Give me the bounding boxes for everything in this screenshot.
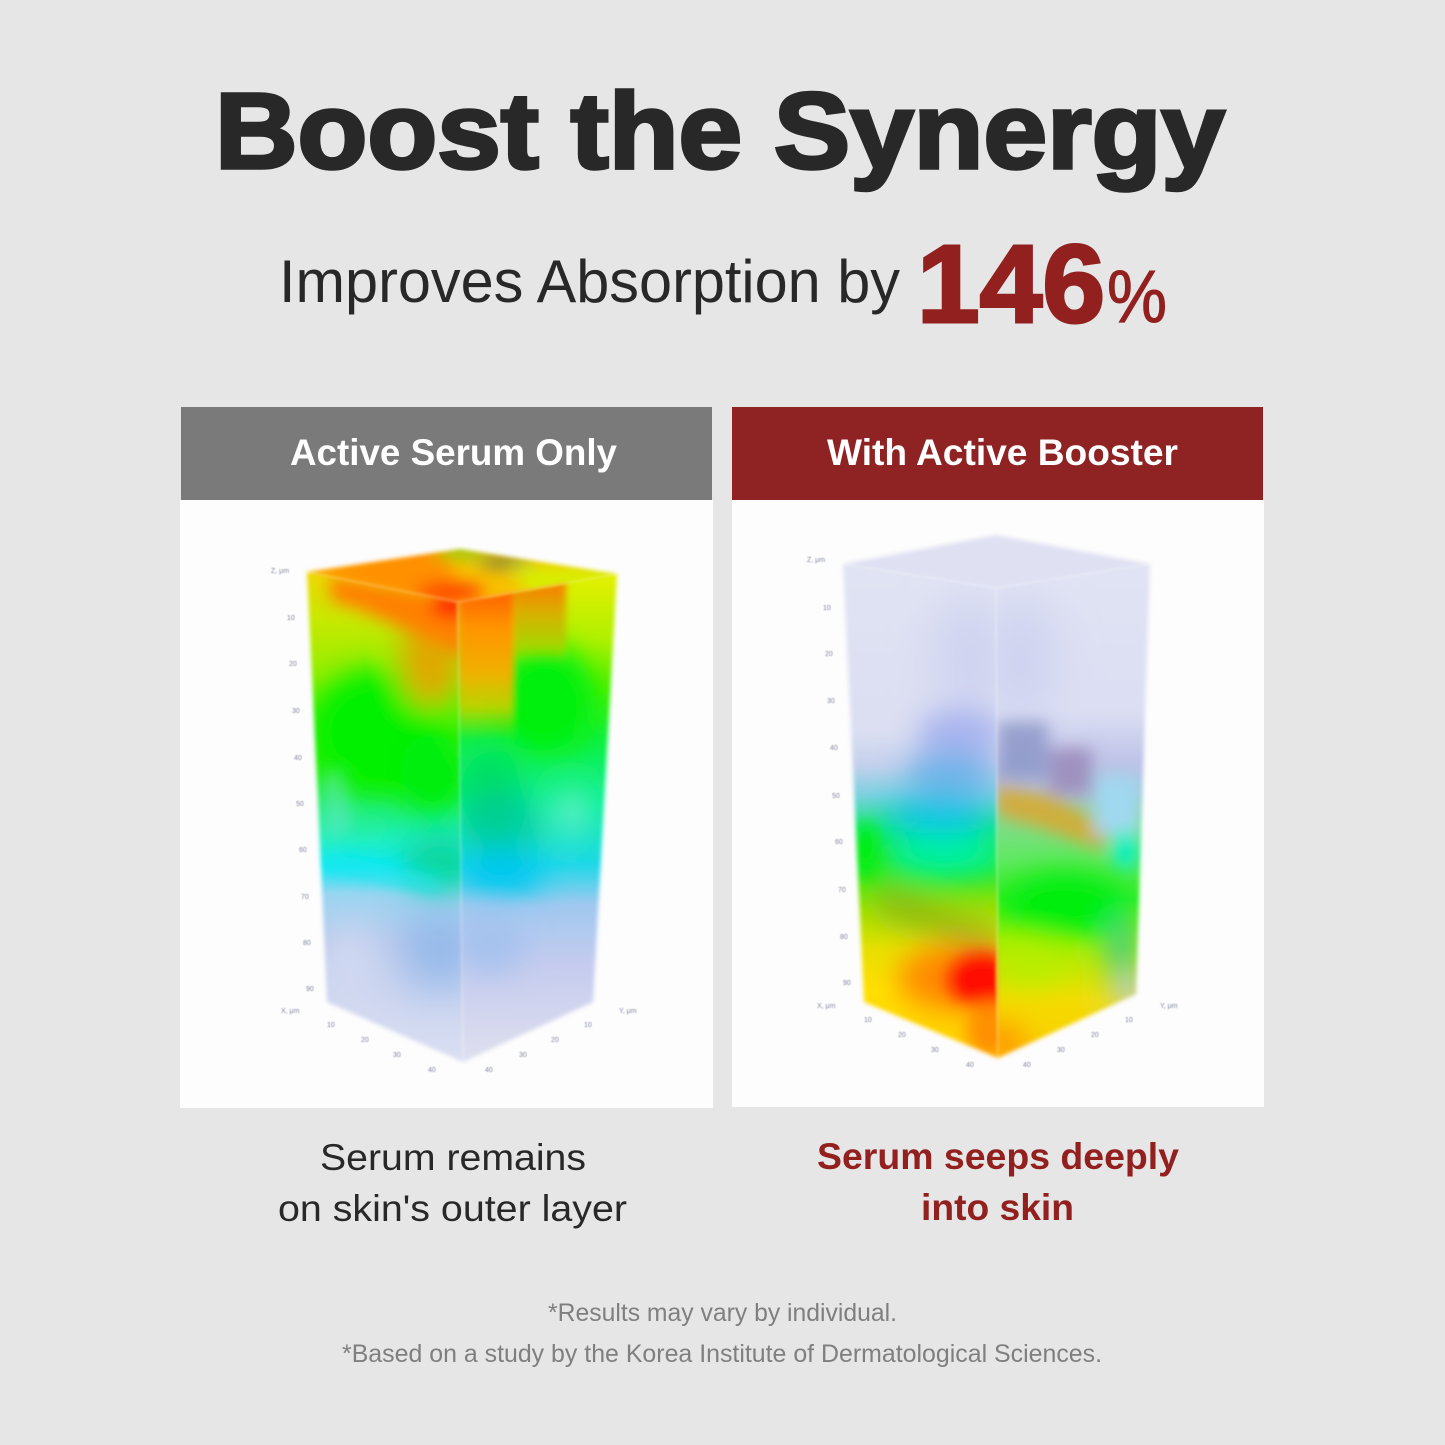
cube edges xyxy=(307,572,617,1062)
cube edges xyxy=(843,564,1150,1058)
axis labels: Z, μm xyxy=(807,557,825,564)
caption: serum seeps deeply xyxy=(817,1136,1179,1228)
axis labels xyxy=(271,568,637,1074)
axis labels: 90 xyxy=(306,986,314,993)
axis labels: 90 xyxy=(843,980,851,987)
axis labels: 60 xyxy=(835,839,843,846)
panel: with active booster xyxy=(732,407,1264,1228)
axis labels: 40 xyxy=(1023,1062,1031,1069)
axis labels: 40 xyxy=(294,755,302,762)
caption: serum remains: Serum remains xyxy=(320,1137,586,1178)
top face xyxy=(306,546,618,606)
header bar: active serum only: Active Serum Only xyxy=(290,432,617,473)
axis labels: 70 xyxy=(838,887,846,894)
axis labels: 70 xyxy=(301,894,309,901)
axis labels: X, μm xyxy=(281,1008,300,1015)
top face xyxy=(843,535,1150,588)
axis labels: 20 xyxy=(825,651,833,658)
axis labels: 10 xyxy=(327,1022,335,1029)
axis labels: 50 xyxy=(832,793,840,800)
right face xyxy=(992,564,1151,1060)
axis labels: 30 xyxy=(827,698,835,705)
axis labels: X, μm xyxy=(817,1003,836,1010)
caption: serum seeps deeply: Serum seeps deeply xyxy=(817,1136,1179,1177)
axis labels: 30 xyxy=(519,1052,527,1059)
axis labels: 20 xyxy=(361,1037,369,1044)
axis labels: 10 xyxy=(1125,1017,1133,1024)
caption: serum remains: on skin's outer layer xyxy=(278,1188,627,1229)
axis labels: 10 xyxy=(584,1022,592,1029)
footnotes xyxy=(342,1299,1102,1368)
axis labels: Y, μm xyxy=(619,1008,637,1015)
footnotes: *Based on a study by the Korea Institute of Dermatological Sciences. xyxy=(342,1340,1102,1368)
axis labels: 10 xyxy=(864,1017,872,1024)
axis labels: 80 xyxy=(303,940,311,947)
header bar: with active booster: With Active Booster xyxy=(827,432,1178,473)
header bar: active serum only xyxy=(181,407,712,500)
3D absorption cube: serum stays at top xyxy=(271,540,637,1080)
axis labels: 20 xyxy=(1091,1032,1099,1039)
cube faces xyxy=(304,546,620,1062)
axis labels xyxy=(807,557,1178,1069)
3D absorption cube: serum reaches bottom xyxy=(807,535,1178,1070)
subtitle text: Improves Absorption by xyxy=(279,248,900,315)
title: Boost the Synergy xyxy=(215,70,1225,191)
axis labels: 30 xyxy=(292,708,300,715)
left face xyxy=(304,569,465,1062)
axis labels: 20 xyxy=(289,661,297,668)
axis labels: 10 xyxy=(823,605,831,612)
axis labels: 60 xyxy=(299,847,307,854)
axis labels: 30 xyxy=(1057,1047,1065,1054)
image panel: booster 3D scan xyxy=(732,500,1264,1107)
left face xyxy=(842,564,1002,1061)
panel: active serum only xyxy=(180,407,713,1229)
axis labels: 30 xyxy=(931,1047,939,1054)
axis labels: 40 xyxy=(428,1067,436,1074)
subtitle with 146% figure xyxy=(279,223,1167,346)
header bar: with active booster xyxy=(732,407,1263,500)
axis labels: Y, μm xyxy=(1160,1003,1178,1010)
axis labels: 20 xyxy=(551,1037,559,1044)
caption: serum seeps deeply: into skin xyxy=(921,1187,1074,1228)
footnotes: *Results may vary by individual. xyxy=(548,1299,897,1327)
axis labels: 10 xyxy=(287,615,295,622)
axis labels: 40 xyxy=(830,745,838,752)
image panel: serum only 3D scan xyxy=(180,500,713,1108)
axis labels: 50 xyxy=(296,801,304,808)
axis labels: 40 xyxy=(485,1067,493,1074)
axis labels: 80 xyxy=(840,934,848,941)
caption: serum remains xyxy=(278,1137,627,1229)
right face xyxy=(455,560,625,1070)
axis labels: 40 xyxy=(966,1062,974,1069)
axis labels: 30 xyxy=(393,1052,401,1059)
146 number: 146 xyxy=(917,223,1105,346)
axis labels: Z, μm xyxy=(271,568,289,575)
percent sign: % xyxy=(1107,255,1167,338)
axis labels: 20 xyxy=(898,1032,906,1039)
cube faces xyxy=(840,535,1159,1070)
